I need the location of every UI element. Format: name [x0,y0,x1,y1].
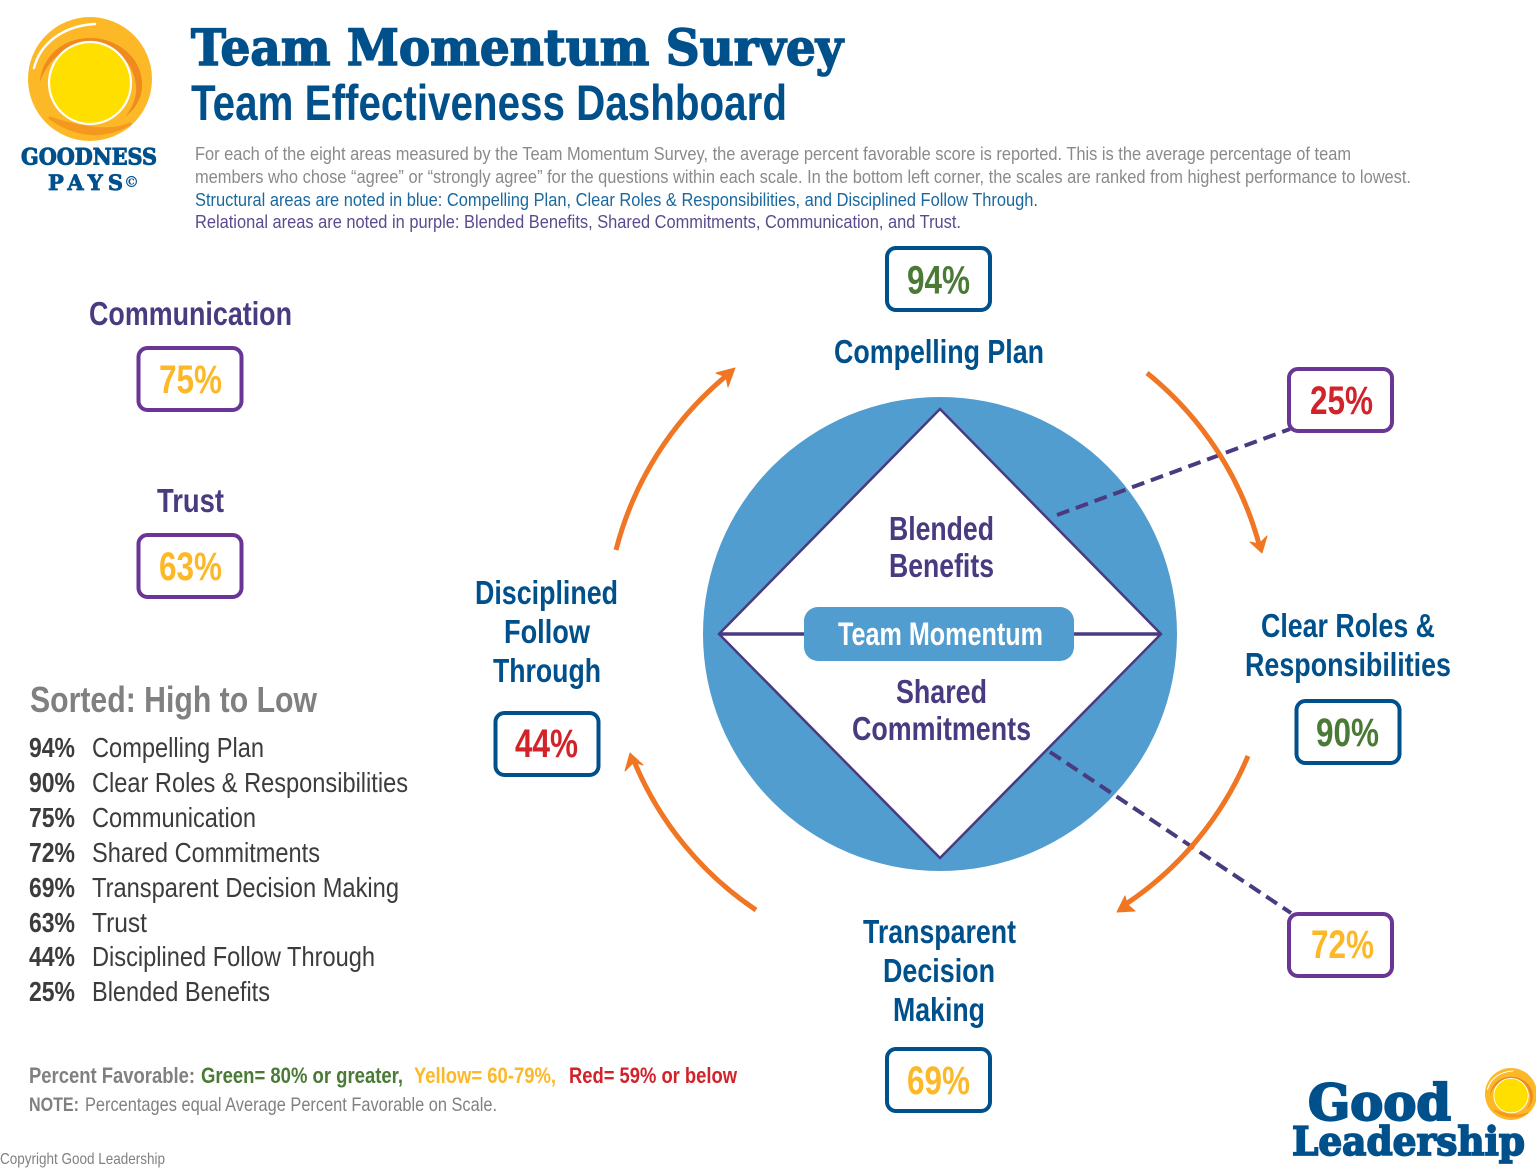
intro text block: Structural areas are noted in blue: Compelling Plan, Clear Roles & Responsibilities, and Disciplined Follow Through. [195,189,1038,210]
panel: Shared Commitments score: 72% [1311,923,1374,967]
logo: Goodness Pays: GOODNESS [21,144,157,170]
note: NOTE: [29,1094,79,1116]
list rows: Compelling Plan [92,732,264,763]
Team Momentum pill: Team Momentum [838,616,1043,652]
panel: Clear Roles & Responsibilities [1245,607,1451,763]
legend: Green= 80% or greater, [201,1063,403,1088]
list rows: 94% [29,732,75,763]
icon: small sun [1485,1068,1536,1120]
Shared Commitments label [852,673,1031,747]
connector: Blended Benefits to 25% [1057,429,1290,515]
subtitle: Team Effectiveness Dashboard [191,75,787,131]
title: Team Momentum Survey [191,18,845,77]
list rows: Communication [92,802,256,833]
arrow: Transparent Decision to Disciplined [625,753,756,910]
list rows: Blended Benefits [92,976,270,1007]
logo: Good Leadership: Leadership [1292,1119,1525,1165]
blue circle [703,397,1177,871]
list rows: Trust [92,907,147,938]
panel: Transparent Decision Making [863,913,1016,1111]
list rows: Shared Commitments [92,837,320,868]
legend: Red= 59% or below [569,1063,738,1088]
arrow: Clear Roles to Transparent Decision [1117,756,1248,912]
logo: Good Leadership: Good [1308,1073,1451,1132]
panel: Trust score [138,482,242,597]
panel: Transparent Decision Making: 69% [907,1059,970,1103]
panel: Transparent Decision Making: Transparent [863,913,1016,950]
legend: Yellow= 60-79%, [414,1063,556,1088]
panel: Disciplined Follow Through [475,574,618,775]
connector: Shared Commitments to 72% [1050,752,1291,913]
copyright: Copyright Good Leadership [0,1151,165,1168]
list rows: 63% [29,907,75,938]
legend [29,1063,738,1088]
panel: Blended Benefits score [1289,369,1392,431]
Team Momentum pill [804,607,1074,661]
Blended Benefits label: Blended [889,510,994,547]
list rows [29,732,408,1007]
legend: Percent Favorable: [29,1063,195,1088]
list rows: 75% [29,802,75,833]
panel: Communication score: 75% [159,358,222,402]
list rows: 69% [29,872,75,903]
list rows: Disciplined Follow Through [92,941,375,972]
panel: Disciplined Follow Through: 44% [515,722,578,766]
Shared Commitments label: Shared [896,673,987,710]
list rows: 90% [29,767,75,798]
panel: Communication score: Communication [89,295,292,332]
panel: Clear Roles & Responsibilities: 90% [1316,711,1379,755]
panel: Shared Commitments score [1289,914,1392,976]
list rows: 44% [29,941,75,972]
list rows: 25% [29,976,75,1007]
intro text block [195,143,1411,232]
central diagram [703,397,1177,871]
panel: Clear Roles & Responsibilities: Responsibilities [1245,646,1451,683]
panel: Compelling Plan: 94% [907,258,970,302]
Blended Benefits label [889,510,994,584]
arrow: Compelling Plan to Clear Roles [1147,373,1267,553]
intro text block: members who chose “agree” or “strongly agree” for the questions within each scale. In the bottom left corner, the scales are ranked from highest performance to lowest. [195,166,1411,187]
panel: Blended Benefits score: 25% [1310,379,1373,423]
logo: Goodness Pays: PAYS [48,170,123,195]
panel: Clear Roles & Responsibilities: Clear Roles & [1261,607,1435,644]
list rows: Transparent Decision Making [92,872,399,903]
logo: Goodness Pays [21,17,157,195]
intro text block: Relational areas are noted in purple: Blended Benefits, Shared Commitments, Communication, and Trust. [195,211,961,232]
panel: Trust score: Trust [157,482,224,519]
panel: Compelling Plan [834,248,1044,370]
panel: Trust score: 63% [159,545,222,589]
panel: Compelling Plan: Compelling Plan [834,333,1044,370]
Blended Benefits label: Benefits [889,547,994,584]
icon: sun [28,17,152,141]
logo: Good Leadership [1292,1068,1536,1165]
panel: Disciplined Follow Through: Follow [504,613,590,650]
panel: Communication score [89,295,292,410]
panel: Disciplined Follow Through: Through [493,652,601,689]
intro text block: For each of the eight areas measured by the Team Momentum Survey, the average percent favorable score is reported. This is the average percentage of team [195,143,1351,164]
white diamond [719,409,1161,858]
panel: Transparent Decision Making: Making [893,991,985,1028]
logo: Goodness Pays: © [124,173,139,191]
list heading: Sorted: High to Low [30,679,318,720]
panel: sorted list [29,679,408,1007]
list rows: Clear Roles & Responsibilities [92,767,408,798]
panel: Transparent Decision Making: Decision [883,952,995,989]
arrow: Disciplined to Compelling Plan [616,368,735,550]
note: Percentages equal Average Percent Favorable on Scale. [85,1094,497,1116]
list rows: 72% [29,837,75,868]
panel: Disciplined Follow Through: Disciplined [475,574,618,611]
Shared Commitments label: Commitments [852,710,1031,747]
horizontal axis [719,632,1161,636]
